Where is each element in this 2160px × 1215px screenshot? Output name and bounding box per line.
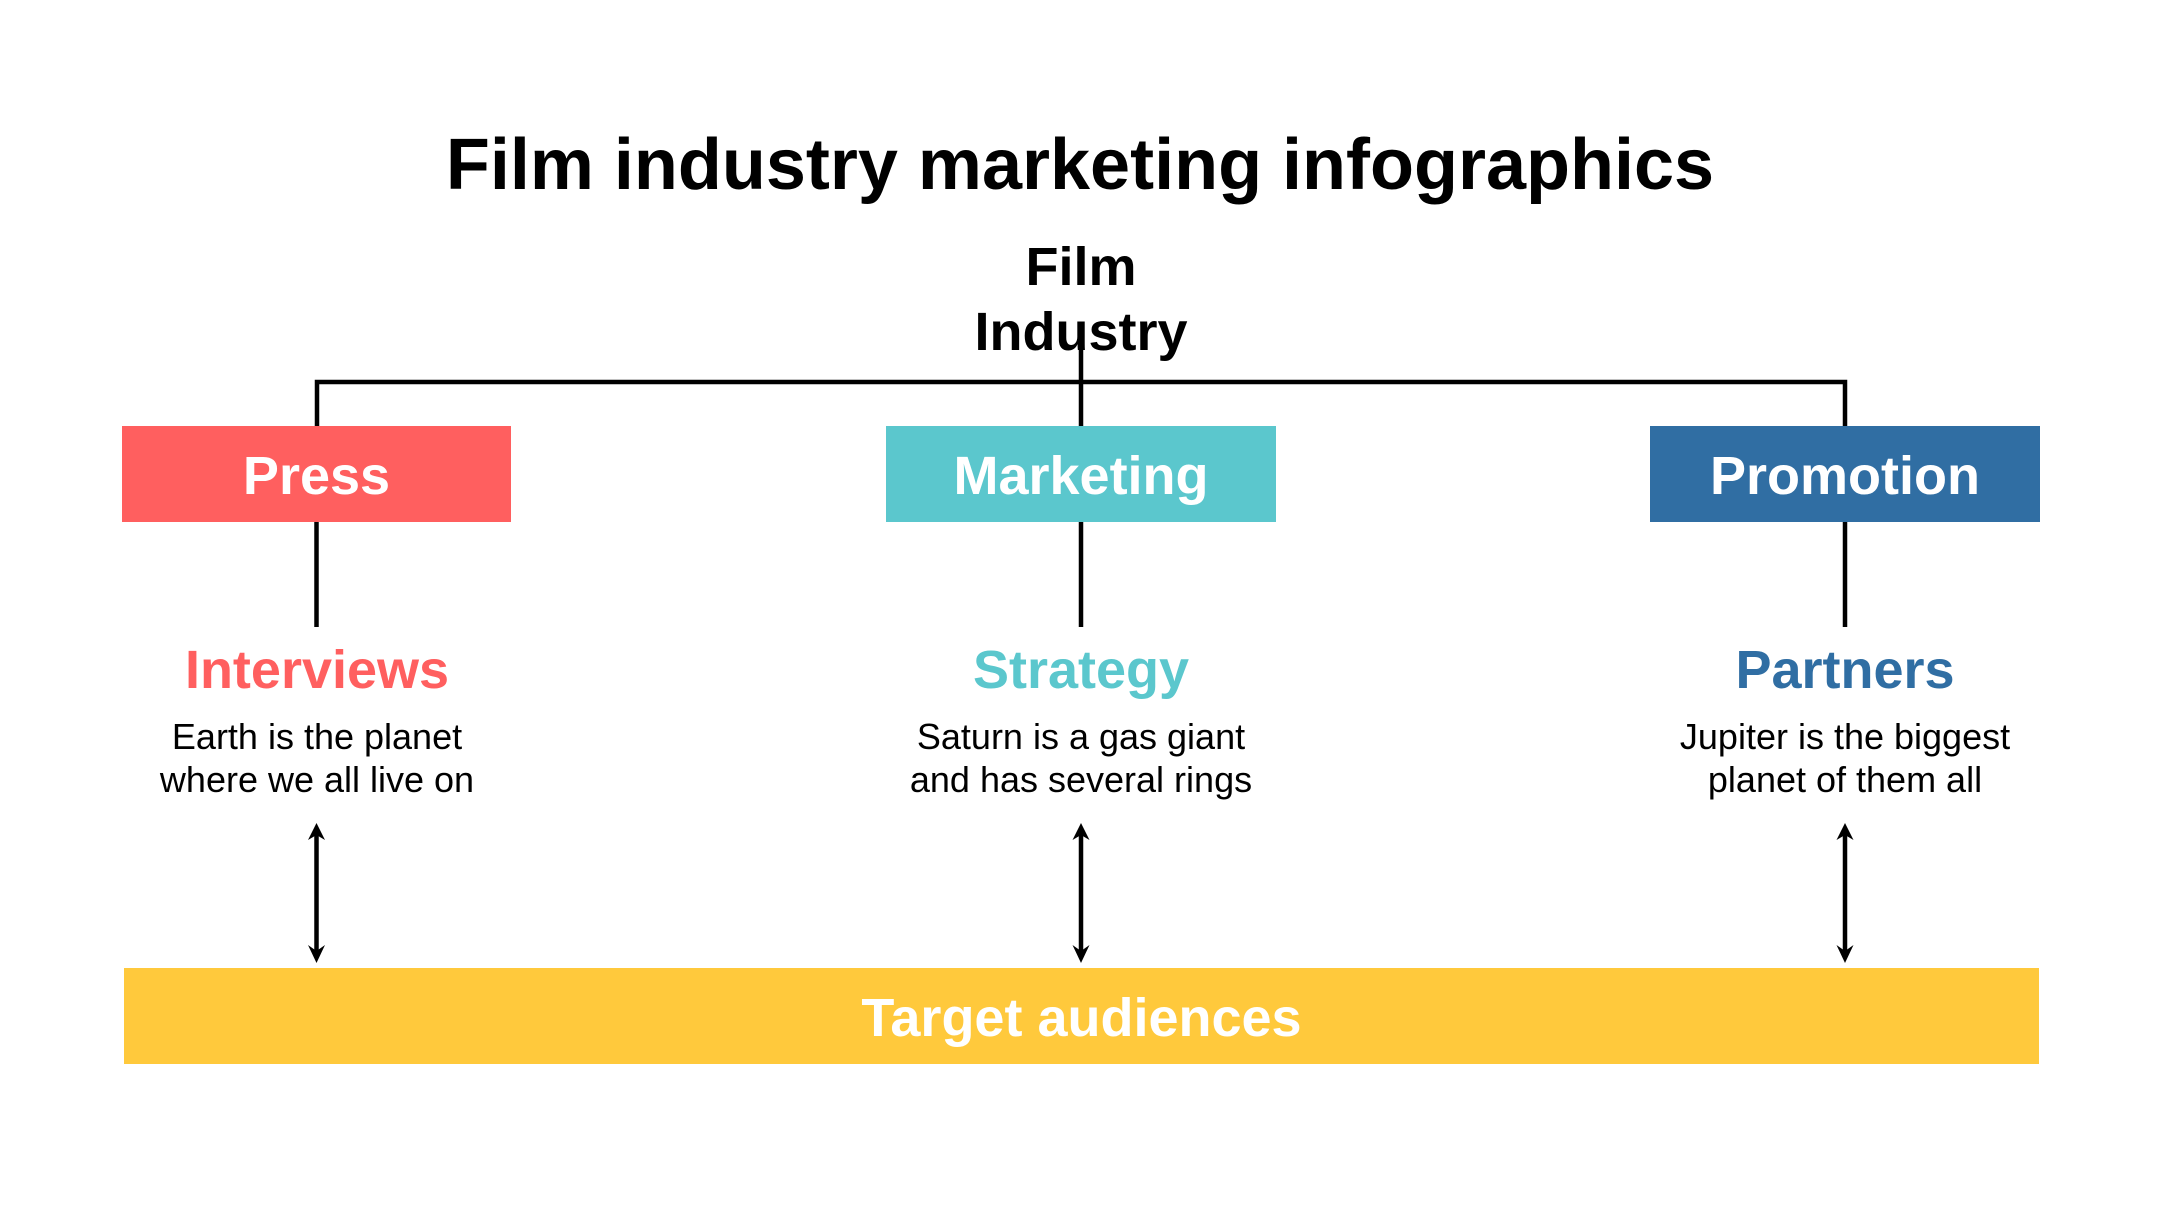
text: Interviews description — [160, 716, 474, 800]
root node: Film Industry: Film — [1025, 236, 1136, 296]
bar: Target audiences: Target audiences — [861, 988, 1302, 1048]
box: Marketing — [886, 426, 1276, 522]
text: Strategy description: Saturn is a gas giant — [917, 716, 1245, 757]
title: Film industry marketing infographics — [446, 125, 1714, 205]
text: Strategy description — [910, 716, 1252, 800]
text: Partners description: planet of them all — [1708, 759, 1982, 800]
text: Partners description — [1680, 716, 2010, 800]
bar: Target audiences — [124, 968, 2039, 1064]
heading: Strategy: Strategy — [973, 640, 1189, 700]
box: Press: Press — [243, 446, 390, 506]
root node: Film Industry: Industry — [974, 302, 1188, 362]
heading: Interviews: Interviews — [185, 640, 449, 700]
box: Press — [122, 426, 511, 522]
text: Interviews description: Earth is the planet — [172, 716, 462, 757]
box: Promotion: Promotion — [1710, 446, 1980, 506]
heading: Partners: Partners — [1735, 640, 1955, 700]
box: Marketing: Marketing — [953, 446, 1209, 506]
root node: Film Industry — [974, 236, 1188, 362]
text: Strategy description: and has several rings — [910, 759, 1252, 800]
text: Interviews description: where we all live on — [160, 759, 474, 800]
box: Promotion — [1650, 426, 2040, 522]
text: Partners description: Jupiter is the biggest — [1680, 716, 2010, 757]
